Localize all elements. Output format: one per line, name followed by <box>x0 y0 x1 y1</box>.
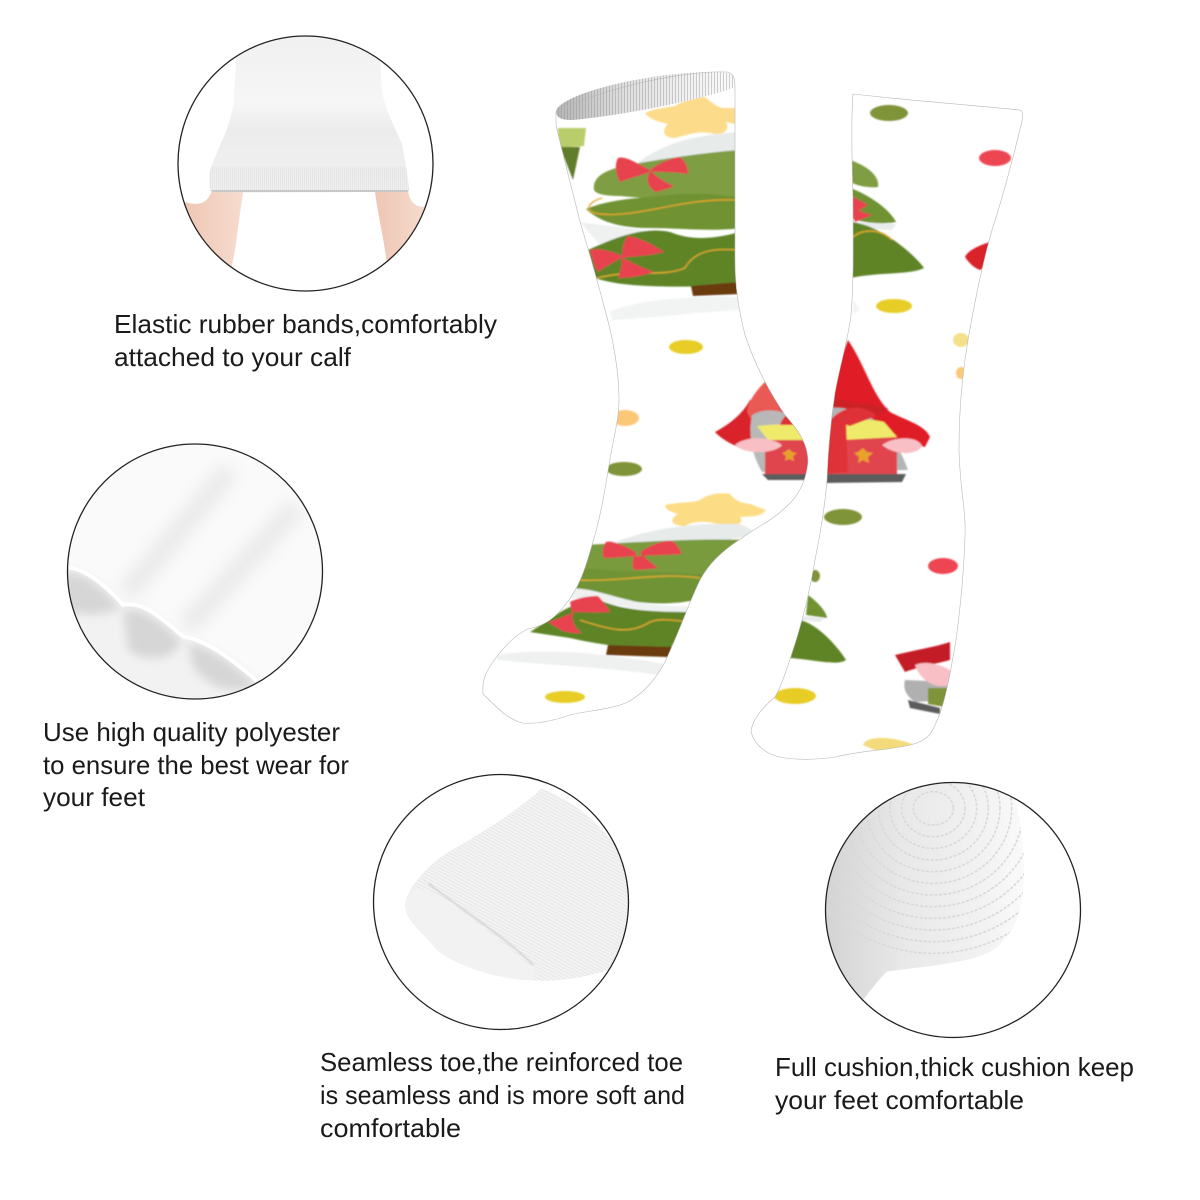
lower bow lower <box>548 596 610 633</box>
dots <box>669 340 703 354</box>
lower trunk <box>606 645 672 657</box>
caption: polyester <box>43 717 349 812</box>
caption: elastic rubber bands <box>114 309 497 372</box>
tree upper tier <box>594 150 740 201</box>
caption: polyester: your feet <box>43 782 146 812</box>
ribbed band <box>207 167 413 192</box>
caption: elastic rubber bands: Elastic rubber bands,comfortably <box>114 309 497 339</box>
tree lower tier <box>588 231 740 287</box>
panel: elastic rubber bands circle <box>178 30 433 291</box>
lower gnome partial <box>895 642 952 714</box>
fabric folds <box>127 470 297 627</box>
knit ribbing <box>412 789 628 980</box>
gnome partial right edge <box>965 242 992 270</box>
lower garland 2 <box>580 620 690 630</box>
caption: elastic rubber bands: attached to your calf <box>114 342 352 372</box>
trunk <box>691 282 740 296</box>
lower star <box>665 493 766 526</box>
right sock <box>750 90 1030 770</box>
terry loops <box>876 783 1024 954</box>
circle outline 3 <box>374 774 628 1030</box>
small tree fragment <box>558 128 586 148</box>
caption: polyester: Use high quality polyester <box>43 717 340 747</box>
cushioned sole <box>826 783 1008 1000</box>
lower tree middle tier <box>576 570 702 604</box>
bow lower <box>590 236 664 278</box>
caption: full cushion <box>775 1052 1134 1115</box>
dot yellow foot <box>545 691 585 703</box>
tree middle tier <box>586 194 740 230</box>
left leg <box>183 192 243 267</box>
dots middle <box>824 509 862 525</box>
garland upper <box>589 198 735 215</box>
right leg <box>375 192 428 262</box>
yellow foot dots <box>774 688 816 704</box>
lower snow cap <box>614 522 752 544</box>
panel: polyester fabric circle <box>60 440 330 710</box>
toe seam <box>428 883 533 965</box>
cuff opening <box>556 72 735 120</box>
star topper <box>645 97 740 138</box>
table surface <box>60 567 260 710</box>
stretched sock <box>209 30 409 192</box>
caption: full cushion: your feet comfortable <box>775 1085 1024 1115</box>
tree right half <box>850 160 878 187</box>
gnome left half <box>715 376 814 480</box>
garland lower <box>597 249 738 278</box>
left sock outline <box>483 72 808 723</box>
caption: seamless toe: is seamless and is more soft and <box>320 1080 685 1110</box>
caption: seamless toe: Seamless toe,the reinforced toe <box>320 1047 683 1077</box>
circle outline 1 <box>178 36 433 291</box>
lower tree lower tier <box>530 600 690 650</box>
lower snow band <box>570 588 690 613</box>
circle outline 2 <box>68 444 322 699</box>
caption: polyester: to ensure the best wear for <box>43 750 349 780</box>
right sock outline <box>751 94 1023 759</box>
dots top <box>870 105 908 121</box>
lower tree upper tier <box>584 538 740 576</box>
caption: seamless toe <box>320 1047 685 1143</box>
gnome right half <box>824 340 930 483</box>
toe shape <box>405 788 632 981</box>
snow cap <box>637 132 735 164</box>
caption: seamless toe: comfortable <box>320 1113 461 1143</box>
ground shadow <box>610 297 740 320</box>
lower garland <box>580 576 700 580</box>
caption: full cushion: Full cushion,thick cushion keep <box>775 1052 1134 1082</box>
lower shadow <box>497 652 670 675</box>
bow upper <box>616 157 688 192</box>
lower tree right half <box>806 595 827 618</box>
lower bow upper <box>603 541 682 570</box>
panel: seamless toe circle <box>365 770 635 1040</box>
circle outline 4 <box>826 782 1080 1038</box>
hem edge <box>68 567 257 681</box>
left sock <box>482 72 808 724</box>
snow band <box>581 222 648 246</box>
panel: full cushion circle <box>824 782 1082 1038</box>
fold shadows <box>63 572 257 690</box>
